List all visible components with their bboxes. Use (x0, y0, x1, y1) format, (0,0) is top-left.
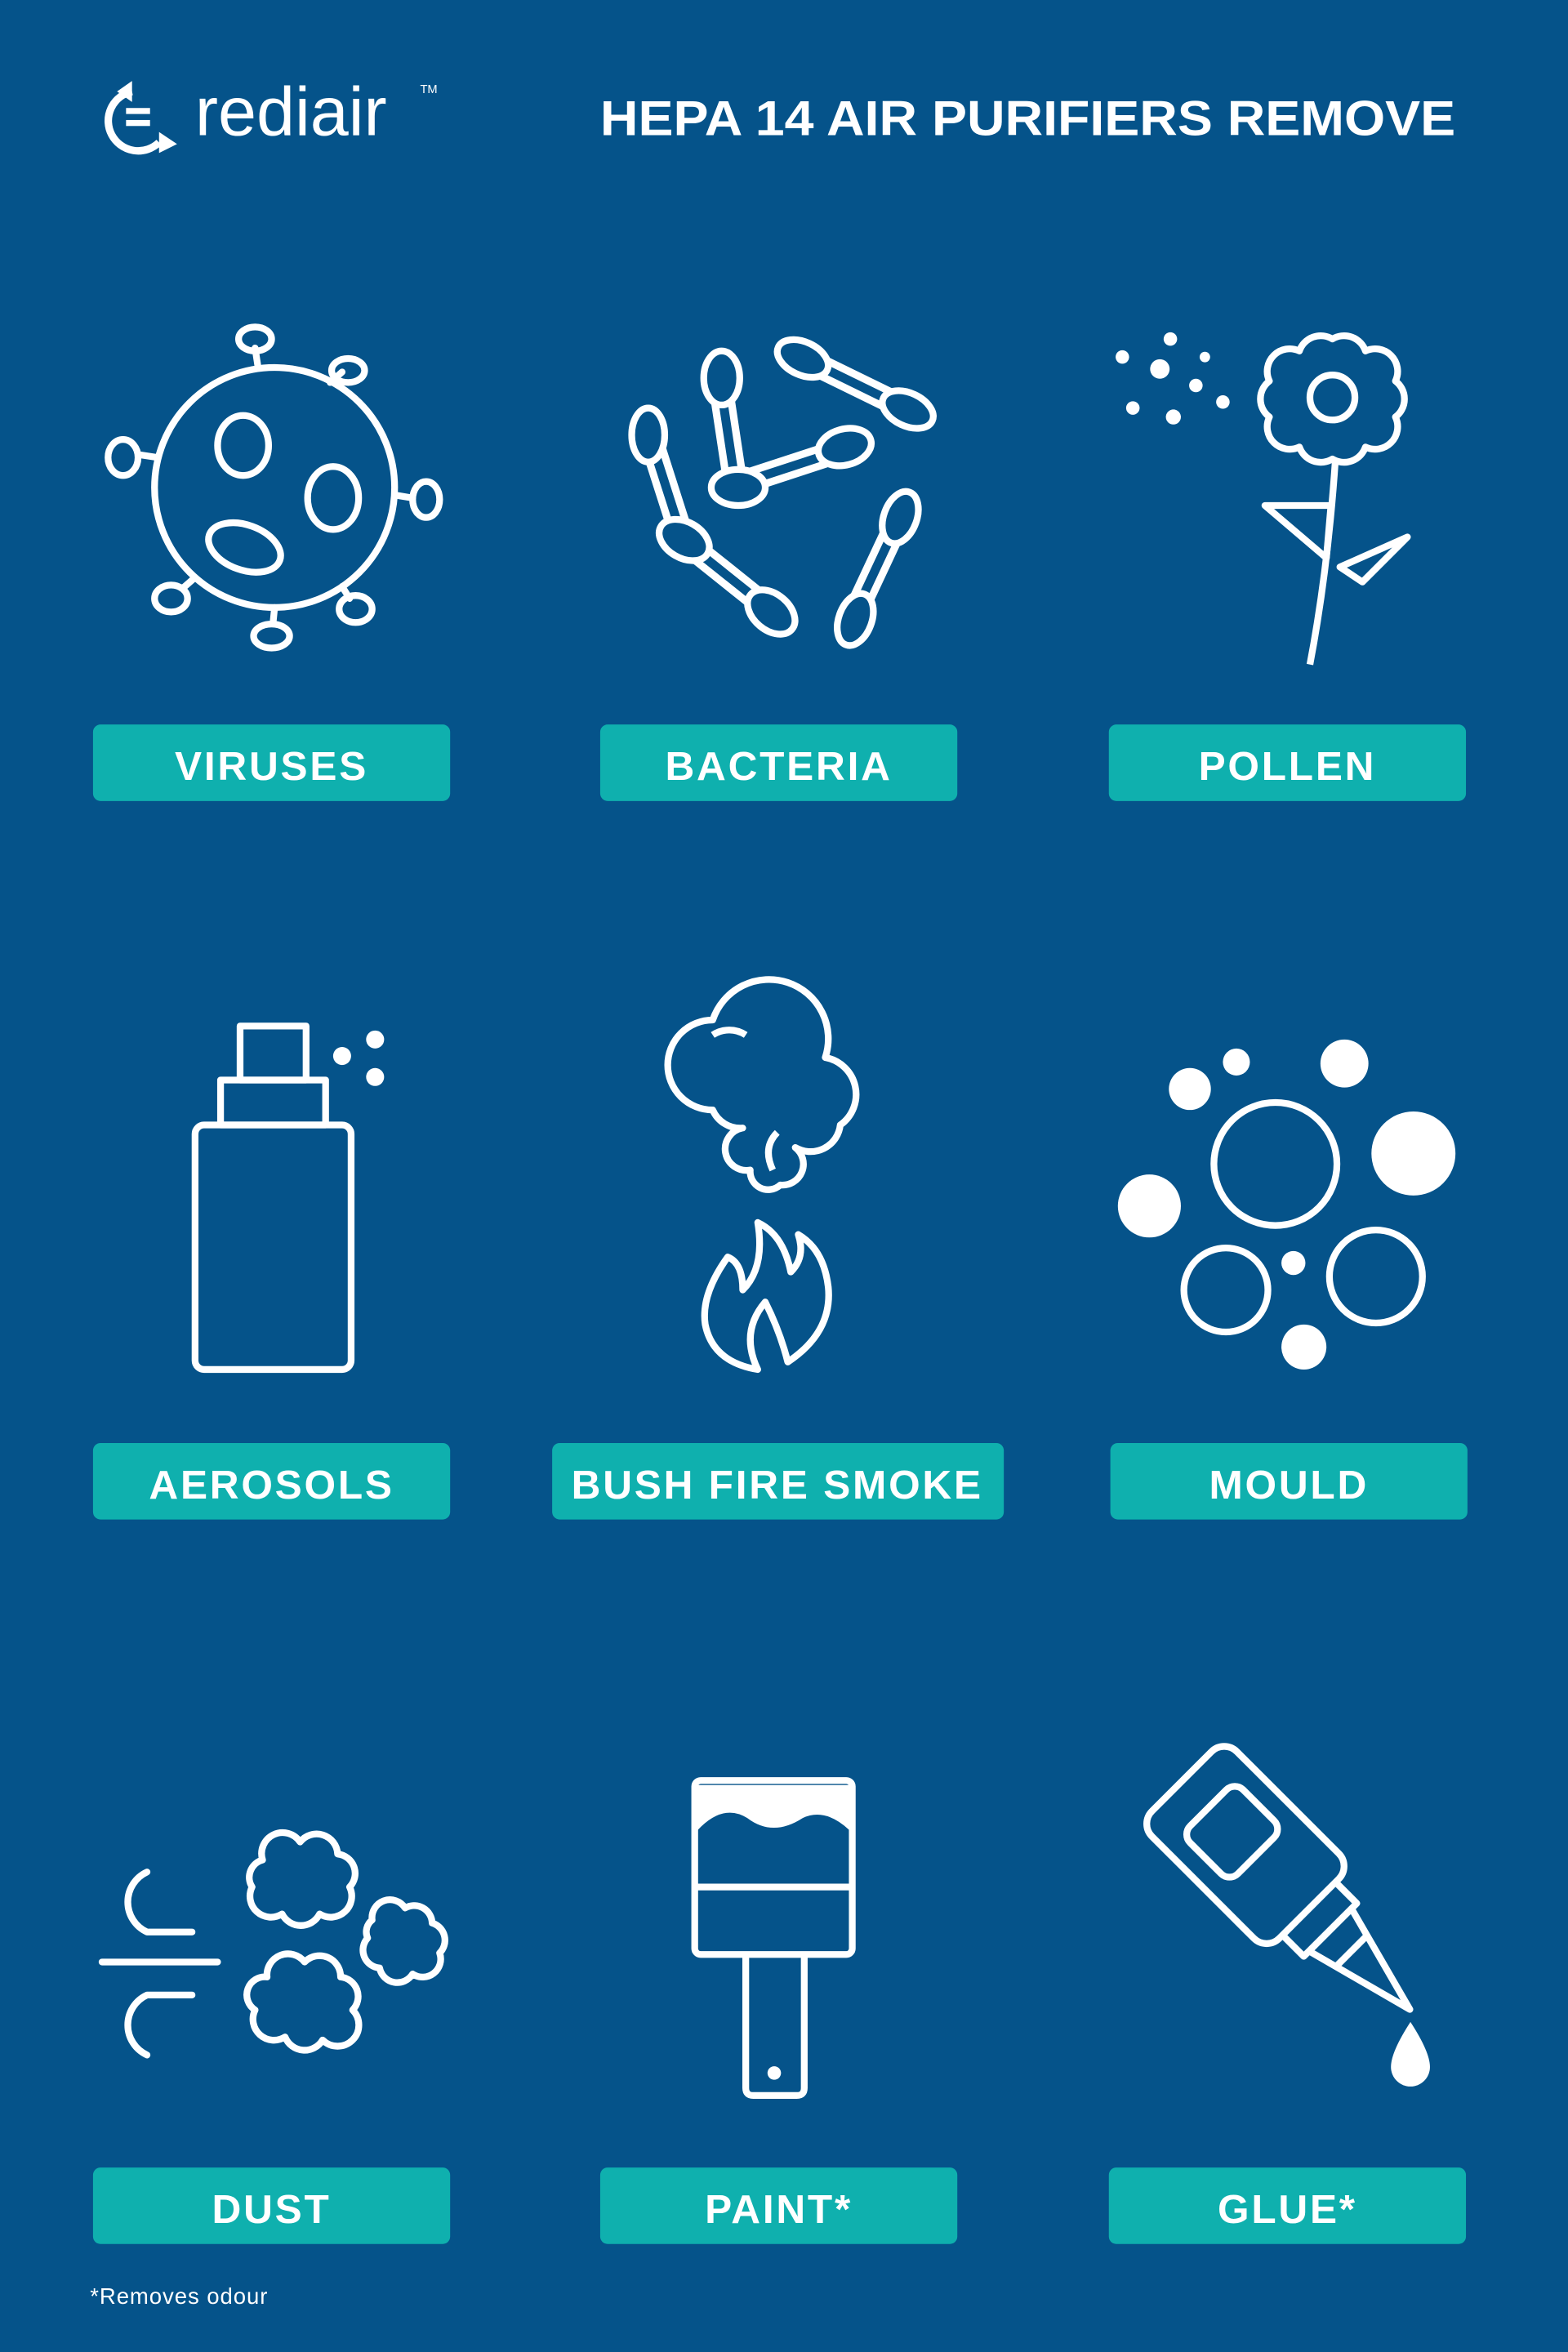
icon: glue bottle (1139, 1739, 1452, 2087)
label: bacteria: BACTERIA (665, 743, 893, 789)
label: pollen: POLLEN (1199, 743, 1376, 789)
icon: dust (102, 1833, 445, 2055)
logo: rediair (109, 73, 438, 153)
label: paint: PAINT* (705, 2186, 853, 2232)
logo: rediair: rediair (195, 73, 387, 149)
icon: bacteria (632, 332, 939, 651)
icon: smoke and fire (668, 979, 856, 1370)
label: viruses: VIRUSES (175, 743, 368, 789)
label: bush fire smoke: BUSH FIRE SMOKE (572, 1462, 983, 1508)
icon: pollen flower (1116, 332, 1407, 665)
icon: virus (108, 327, 439, 648)
title: HEPA 14 AIR PURIFIERS REMOVE (600, 90, 1455, 145)
label: pollen (1109, 724, 1466, 801)
label: mould (1111, 1443, 1468, 1520)
label: aerosols (93, 1443, 450, 1520)
label: dust: DUST (212, 2186, 332, 2232)
label: glue (1109, 2167, 1466, 2244)
label: dust (93, 2167, 450, 2244)
label: aerosols: AEROSOLS (149, 1462, 394, 1508)
label: glue: GLUE* (1218, 2186, 1357, 2232)
label: viruses (93, 724, 450, 801)
icon: aerosol can (195, 1026, 384, 1370)
label: bush fire smoke (552, 1443, 1004, 1520)
label: paint (600, 2167, 957, 2244)
icon: mould spores (1118, 1040, 1455, 1370)
logo: rediair: TM (420, 83, 438, 96)
footnote: *Removes odour (90, 2283, 268, 2309)
icon: paint brush (695, 1780, 853, 2096)
label: bacteria (600, 724, 957, 801)
label: mould: MOULD (1209, 1462, 1369, 1508)
